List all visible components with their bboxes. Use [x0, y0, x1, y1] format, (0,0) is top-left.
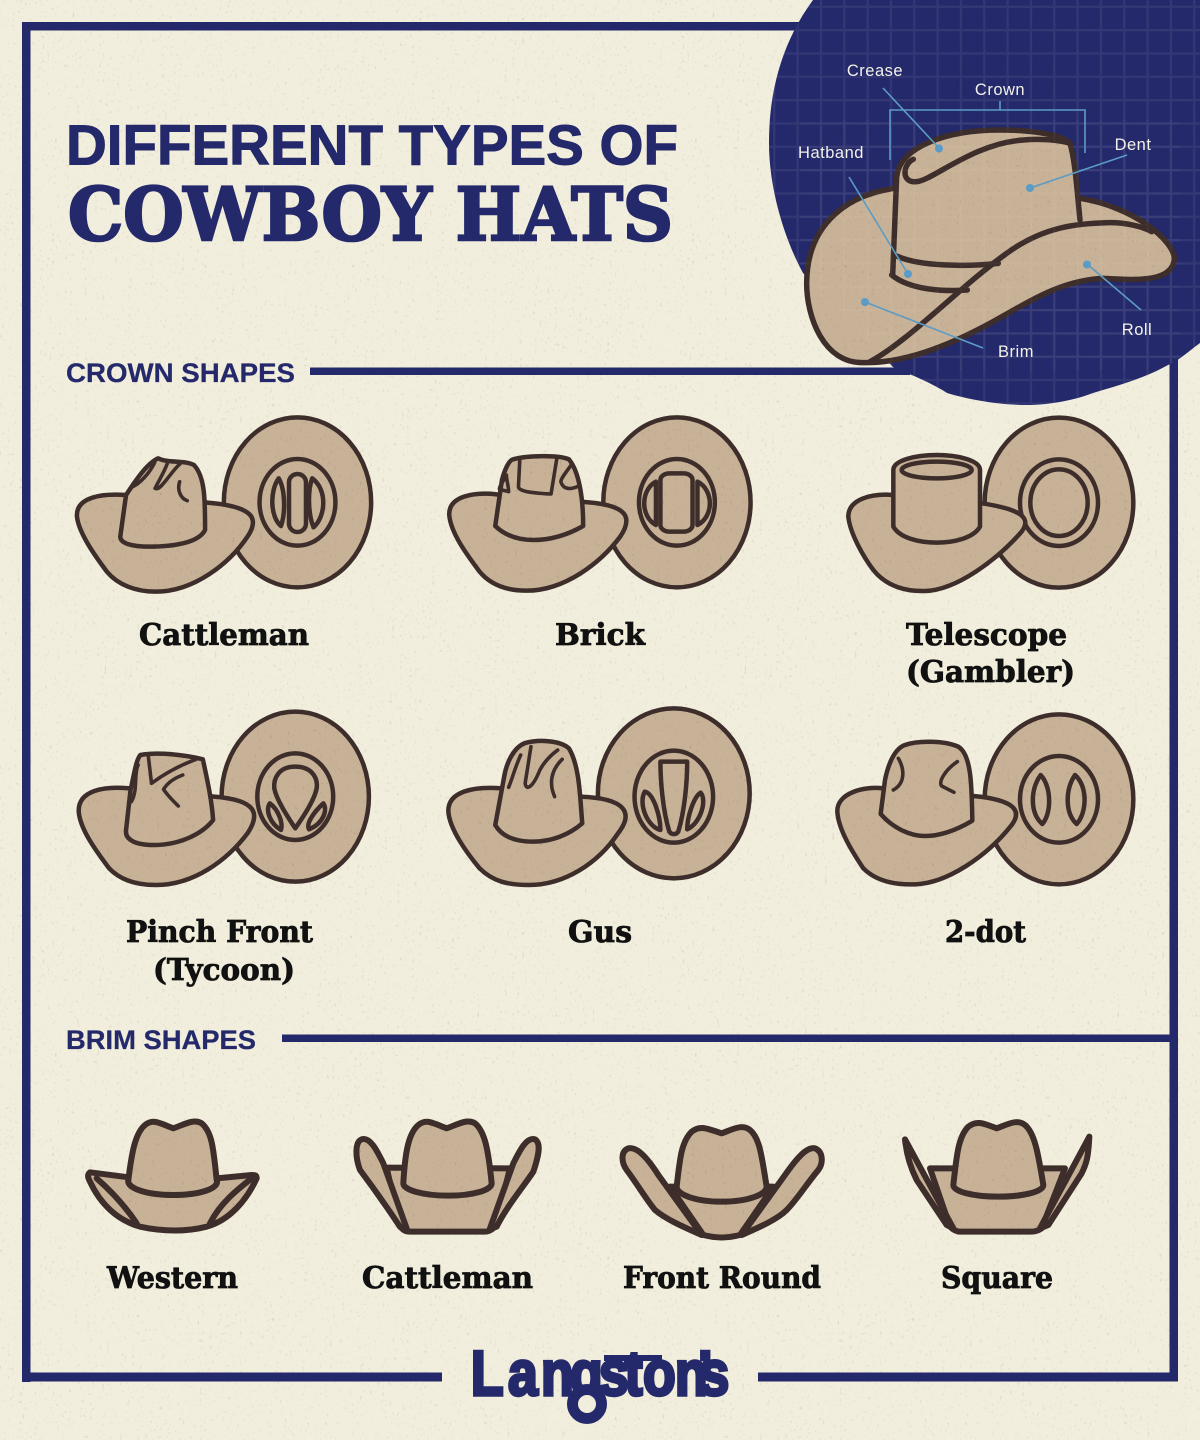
crown bracket	[890, 101, 1085, 160]
hat: brick crown	[449, 417, 751, 591]
title line 2: COWBOY HATS	[68, 172, 673, 258]
label: front round: Front Round	[623, 1260, 821, 1295]
label: telescope (gambler): (Gambler)	[906, 654, 1075, 689]
hat: front round brim	[622, 1127, 822, 1237]
hat: telescope crown	[848, 418, 1133, 591]
hatband callout: Hatband	[798, 144, 864, 162]
crown callout: Crown	[975, 81, 1025, 99]
brim callout: Brim	[998, 343, 1034, 361]
label: telescope (gambler): Telescope	[906, 617, 1067, 652]
anatomy panel: navy blueprint blob	[760, 0, 1200, 410]
label: western: Western	[106, 1260, 238, 1295]
label: brick: Brick	[555, 617, 646, 652]
hat: 2-dot crown	[837, 714, 1133, 884]
hat: pinch front crown	[79, 712, 369, 885]
crease callout: Crease	[847, 62, 903, 80]
title	[66, 114, 678, 258]
hat: cattleman brim	[356, 1122, 539, 1232]
title line 1: DIFFERENT TYPES OF	[66, 114, 678, 178]
heading: crown shapes: CROWN SHAPES	[66, 358, 295, 388]
label: gus: Gus	[568, 914, 632, 949]
label: 2-dot: 2-dot	[945, 914, 1026, 949]
dent callout	[1026, 136, 1151, 192]
label: telescope (gambler)	[906, 617, 1075, 689]
label: square: Square	[941, 1260, 1053, 1295]
heading: brim shapes: BRIM SHAPES	[66, 1025, 256, 1055]
brim callout	[861, 298, 1034, 361]
crease callout	[847, 62, 943, 152]
logo: Langston's: Langston’s	[471, 1339, 729, 1409]
roll callout	[1083, 260, 1152, 339]
hat: cattleman crown	[77, 417, 371, 592]
label: pinch front (tycoon): Pinch Front	[126, 914, 313, 949]
hat: gus crown	[448, 708, 750, 885]
brim shapes divider	[282, 1034, 1170, 1042]
label: cattleman crown: Cattleman	[139, 617, 309, 652]
hat: western brim	[88, 1122, 257, 1230]
dent callout: Dent	[1115, 136, 1151, 154]
label: pinch front (tycoon)	[126, 914, 313, 987]
anatomy callouts	[798, 62, 1152, 361]
crown shapes divider	[310, 368, 910, 375]
hat: square brim	[905, 1122, 1089, 1232]
hatband callout	[798, 144, 912, 278]
roll callout: Roll	[1122, 321, 1152, 339]
label: cattleman brim: Cattleman	[362, 1260, 533, 1295]
label: pinch front (tycoon): (Tycoon)	[153, 952, 295, 987]
anatomy hat illustration	[807, 130, 1174, 363]
